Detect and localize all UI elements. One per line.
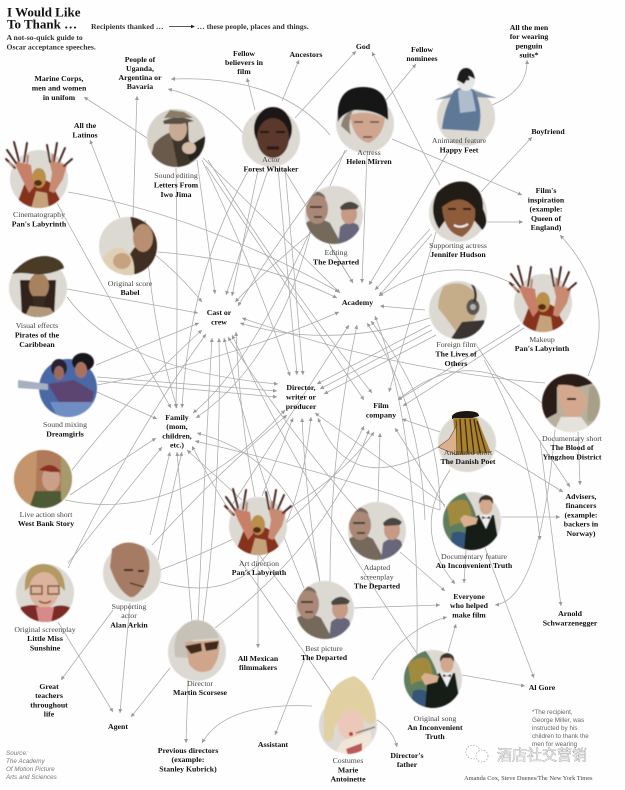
- label: Documentary feature An Inconvenient Truth: Documentary feature: [441, 552, 508, 561]
- credit: Amanda Cox, Steve Duenes/The New York Times: [464, 775, 593, 782]
- label: Live action short West Bank Story: West Bank Story: [18, 519, 74, 528]
- portrait: Animated short The Danish Poet: [438, 411, 496, 472]
- hub: Academy: Academy: [342, 298, 373, 307]
- label: Original screenplay Little Miss Sunshine: Little Miss: [27, 634, 63, 643]
- label: Animated feature Happy Feet: Happy Feet: [440, 145, 479, 154]
- portrait: Animated feature Happy Feet: [434, 68, 497, 146]
- label: Costumes Marie Antoinette: Costumes: [333, 756, 363, 765]
- label: Director Martin Scorsese: Martin Scorsese: [173, 688, 227, 697]
- arrows to Family: [57, 150, 440, 622]
- portrait: Original screenplay Little Miss Sunshine: [16, 564, 74, 623]
- title: I Would Like: [7, 4, 81, 20]
- portrait: Documentary short The Blood of Yingzhou District: [542, 374, 600, 433]
- label: Art direction Pan's Labyrinth: Pan's Labyrinth: [232, 568, 287, 577]
- label: Supporting actress Jennifer Hudson: Supporting actress: [429, 241, 487, 250]
- hub: Director, writer or producer: Director,: [286, 383, 316, 392]
- label: Original song An Inconvenient Truth: Truth: [425, 732, 445, 741]
- hub: Family: children,: [162, 431, 192, 440]
- label: Sound editing Letters From Iwo Jima: Sound editing: [154, 171, 198, 180]
- recipient: People of Uganda, Argentina or Bavaria: Argentina or: [118, 73, 162, 82]
- recipient: All the men for wearing penguin suits: All the men: [510, 23, 549, 32]
- label: Original score Babel: Original score: [108, 279, 153, 288]
- label: Visual effects Pirates of the Caribbean: Caribbean: [19, 340, 55, 349]
- recipient: Previous directors: (example:: [172, 755, 204, 764]
- recipient: Fellow believers in film: film: [237, 67, 251, 76]
- portrait: Director Martin Scorsese: [168, 620, 226, 681]
- watermark: WeChat logo and account name: 酒店社交营销: [497, 746, 587, 764]
- recipient: Advisers, financers: backers in: [564, 520, 599, 529]
- label: Supporting actor Alan Arkin: Alan Arkin: [110, 621, 148, 630]
- hub: Everyone who helped make film: who helped: [450, 601, 489, 610]
- label: Editing The Departed: The Departed: [313, 257, 360, 266]
- arrows to Director, writer or producer: [65, 160, 445, 588]
- label: Supporting actor Alan Arkin: Supporting: [112, 602, 146, 611]
- recipient: All the Latinos: Latinos: [72, 130, 98, 139]
- label: Cinematography Pan's Labyrinth: Cinematography: [13, 210, 65, 219]
- label: Best picture The Departed: The Departed: [301, 653, 348, 662]
- label: Supporting actor Alan Arkin: actor: [121, 611, 137, 620]
- recipient: People of Uganda, Argentina or Bavaria: People of: [125, 55, 156, 64]
- label: Documentary short The Blood of Yingzhou District: Documentary short: [542, 434, 603, 443]
- title: To Thank …: [7, 16, 77, 32]
- label: Foreign film The Lives of Others: Foreign film: [436, 340, 476, 349]
- hub: Family: (mom,: [166, 422, 188, 431]
- label: Art direction Pan's Labyrinth: Art direction: [239, 559, 279, 568]
- label: Documentary short The Blood of Yingzhou District: Yingzhou District: [543, 453, 602, 462]
- hub: Film company: company: [366, 410, 396, 419]
- recipient: Advisers, financers: financers: [566, 501, 596, 510]
- recipient: Director's father: father: [397, 760, 418, 769]
- recipient: Al Gore: Al Gore: [529, 683, 556, 692]
- recipient: Great teachers throughout life: teachers: [35, 691, 63, 700]
- footnote: *The recipient,: [532, 709, 573, 716]
- recipient: Advisers, financers: Advisers,: [566, 492, 597, 501]
- portrait: Adapted screenplay The Departed: [345, 502, 407, 561]
- recipient: Film's inspiration: England): [531, 223, 562, 232]
- label: Sound editing Letters From Iwo Jima: Letters From: [154, 180, 199, 189]
- recipient: All the Latinos: All the: [74, 121, 97, 130]
- legend: recipients thanked to these people, places and things: [91, 22, 309, 31]
- hub: Film company: Film: [373, 401, 389, 410]
- portrait: Foreign film The Lives of Others: [429, 281, 488, 340]
- label: Makeup Pan's Labyrinth: Pan's Labyrinth: [515, 344, 570, 353]
- watermark: WeChat logo and account name: [466, 745, 587, 764]
- recipient: Arnold Schwarzenegger: Schwarzenegger: [543, 618, 598, 627]
- label: Adapted screenplay The Departed: Adapted: [364, 563, 390, 572]
- portrait: Sound mixing Dreamgirls: [18, 353, 97, 418]
- recipient: All the men for wearing penguin suits: penguin: [516, 41, 543, 50]
- subtitle: A not-so-quick guide to: [6, 33, 83, 42]
- portrait: Live action short West Bank Story: [14, 450, 72, 509]
- label: Actress Helen Mirren: Helen Mirren: [346, 157, 392, 166]
- recipient: Agent: Agent: [108, 722, 128, 731]
- label: Animated short The Danish Poet: The Danish Poet: [440, 457, 496, 466]
- recipient: Assistant: Assistant: [258, 740, 289, 749]
- legend: recipients thanked to these people, places and things: … these people, places and things.: [197, 22, 309, 31]
- legend: recipients thanked to these people, places and things: Recipients thanked …: [91, 22, 164, 31]
- hub: Director, writer or producer: producer: [286, 402, 317, 411]
- label: Actor Forest Whitaker: Forest Whitaker: [244, 164, 299, 173]
- label: Makeup Pan's Labyrinth: Makeup: [529, 335, 555, 344]
- portrait: Best picture The Departed: [293, 581, 355, 640]
- portrait: Visual effects Pirates of the Caribbean: [9, 256, 67, 318]
- recipient: Great teachers throughout life: throughout: [30, 700, 68, 709]
- recipient: Film's inspiration: Film's: [536, 186, 556, 195]
- portrait: Original score Babel: [99, 216, 158, 276]
- recipient: Great teachers throughout life: Great: [39, 682, 59, 691]
- label: Costumes Marie Antoinette: Marie: [338, 765, 359, 774]
- label: Editing The Departed: Editing: [325, 248, 348, 257]
- recipient: People of Uganda, Argentina or Bavaria: Uganda,: [126, 64, 154, 73]
- recipient: Previous directors: Stanley Kubrick): [159, 765, 217, 774]
- recipient: God: God: [356, 42, 371, 51]
- recipient: Director's father: Director's: [390, 751, 424, 760]
- portrait: Original song An Inconvenient Truth: [404, 650, 462, 709]
- labels: nominee categories and films: [12, 136, 603, 784]
- recipient: Film's inspiration: inspiration: [528, 195, 565, 204]
- portrait: Supporting actor Alan Arkin: [103, 542, 161, 602]
- label: Animated feature Happy Feet: Animated feature: [432, 136, 487, 145]
- footnote: children to thank the: [532, 733, 589, 740]
- recipient: All Mexican filmmakers: All Mexican: [238, 654, 279, 663]
- label: Director Martin Scorsese: Director: [187, 679, 213, 688]
- portrait: Art direction Pan's Labyrinth: [225, 489, 291, 556]
- recipient: Fellow believers in film: believers in: [225, 58, 264, 67]
- label: Original score Babel: Babel: [120, 288, 140, 297]
- arrows to outer recipients: [58, 51, 599, 747]
- source note: The Academy: [6, 758, 45, 765]
- label: Adapted screenplay The Departed: screenplay: [360, 572, 394, 581]
- label: Supporting actress Jennifer Hudson: Jennifer Hudson: [430, 250, 486, 259]
- footnote: instructed by his: [532, 725, 578, 732]
- recipient: Marine Corps, men and women in unifom: men and women: [32, 83, 87, 92]
- hub: Everyone who helped make film: make film: [452, 610, 486, 619]
- arrows to Academy: [68, 152, 515, 652]
- source note: Arts and Sciences: [5, 774, 58, 781]
- recipient: Advisers, financers: Norway): [566, 529, 596, 538]
- portrait: Actor Forest Whitaker: [242, 107, 300, 167]
- subtitle: Oscar acceptance speeches.: [6, 42, 96, 52]
- source note: Of Motion Picture: [6, 766, 55, 773]
- recipient: Great teachers throughout life: life: [44, 710, 55, 719]
- recipient: Marine Corps, men and women in unifom: in unifom: [43, 93, 76, 102]
- label: Original screenplay Little Miss Sunshine: Original screenplay: [14, 625, 76, 634]
- portrait: Documentary feature An Inconvenient Truth: [443, 492, 501, 551]
- portrait: Supporting actress Jennifer Hudson: [429, 181, 487, 242]
- recipient: Advisers, financers: (example:: [565, 510, 597, 519]
- source note: Source:: [6, 750, 28, 757]
- recipient: Fellow nominees: Fellow: [411, 45, 433, 54]
- portrait: Editing The Departed: [302, 186, 364, 245]
- label: Foreign film The Lives of Others: The Lives of: [435, 349, 477, 358]
- hub: Cast or crew: Cast or: [207, 308, 232, 317]
- recipient: Film's inspiration: (example:: [530, 205, 562, 214]
- portrait: Actress Helen Mirren: [336, 87, 394, 153]
- label: Actress Helen Mirren: Actress: [357, 148, 381, 157]
- hub: Everyone who helped make film: Everyone: [453, 592, 485, 601]
- label: Sound mixing Dreamgirls: Dreamgirls: [46, 429, 84, 438]
- recipient: Fellow believers in film: Fellow: [233, 49, 255, 58]
- arrows to Cast or crew: [67, 150, 545, 655]
- label: Original song An Inconvenient Truth: An Inconvenient: [407, 723, 463, 732]
- portrait: Makeup Pan's Labyrinth: [510, 266, 576, 333]
- arrows to Everyone who helped make film: [354, 430, 555, 680]
- label: Sound mixing Dreamgirls: Sound mixing: [43, 420, 87, 429]
- recipient: All the men for wearing penguin suits: suits*: [519, 51, 539, 60]
- label: Best picture The Departed: Best picture: [305, 644, 343, 653]
- footnote: men for wearing: [532, 741, 578, 748]
- hub: Family: Family: [165, 413, 189, 422]
- hub: Director, writer or producer: writer or: [286, 392, 317, 401]
- recipient: All Mexican filmmakers: filmmakers: [239, 663, 277, 672]
- label: Documentary feature An Inconvenient Truth: An Inconvenient Truth: [436, 561, 513, 570]
- portrait: Costumes Marie Antoinette: [319, 676, 377, 755]
- recipient: Previous directors: Previous directors: [158, 746, 218, 755]
- label: Animated short The Danish Poet: Animated short: [444, 448, 493, 457]
- hub: Family: etc.): [170, 441, 184, 450]
- label: Adapted screenplay The Departed: The Departed: [354, 582, 401, 591]
- label: Cinematography Pan's Labyrinth: Pan's Labyrinth: [12, 219, 67, 228]
- recipient: Arnold Schwarzenegger: Arnold: [558, 609, 583, 618]
- label: Live action short West Bank Story: Live action short: [20, 510, 73, 519]
- recipient: All the men for wearing penguin suits: for wearing: [510, 32, 548, 41]
- label: Original screenplay Little Miss Sunshine: Sunshine: [30, 644, 61, 653]
- recipient: Ancestors: Ancestors: [290, 50, 322, 59]
- arrows to Film company: [160, 160, 542, 628]
- recipient: Boyfriend: Boyfriend: [531, 127, 565, 136]
- hub: Cast or crew: crew: [211, 317, 227, 326]
- label: Original song An Inconvenient Truth: Original song: [414, 714, 456, 723]
- label: Documentary short The Blood of Yingzhou District: The Blood of: [551, 443, 594, 452]
- label: Sound editing Letters From Iwo Jima: Iwo Jima: [161, 190, 192, 199]
- recipient: Fellow nominees: nominees: [406, 54, 438, 63]
- label: Actor Forest Whitaker: Actor: [262, 155, 280, 164]
- portrait: Cinematography Pan's Labyrinth: [6, 142, 72, 209]
- label: Visual effects Pirates of the Caribbean: Pirates of the: [15, 330, 60, 339]
- recipient: Marine Corps, men and women in unifom: Marine Corps,: [35, 74, 84, 83]
- recipient: Film's inspiration: Queen of: [531, 214, 561, 223]
- label: Costumes Marie Antoinette: Antoinette: [330, 775, 366, 784]
- recipient: People of Uganda, Argentina or Bavaria: Bavaria: [127, 82, 153, 91]
- footnote: George Miller, was: [532, 717, 584, 724]
- portrait: Sound editing Letters From Iwo Jima: [147, 109, 205, 168]
- label: Visual effects Pirates of the Caribbean: Visual effects: [16, 321, 58, 330]
- label: Foreign film The Lives of Others: Others: [445, 359, 467, 368]
